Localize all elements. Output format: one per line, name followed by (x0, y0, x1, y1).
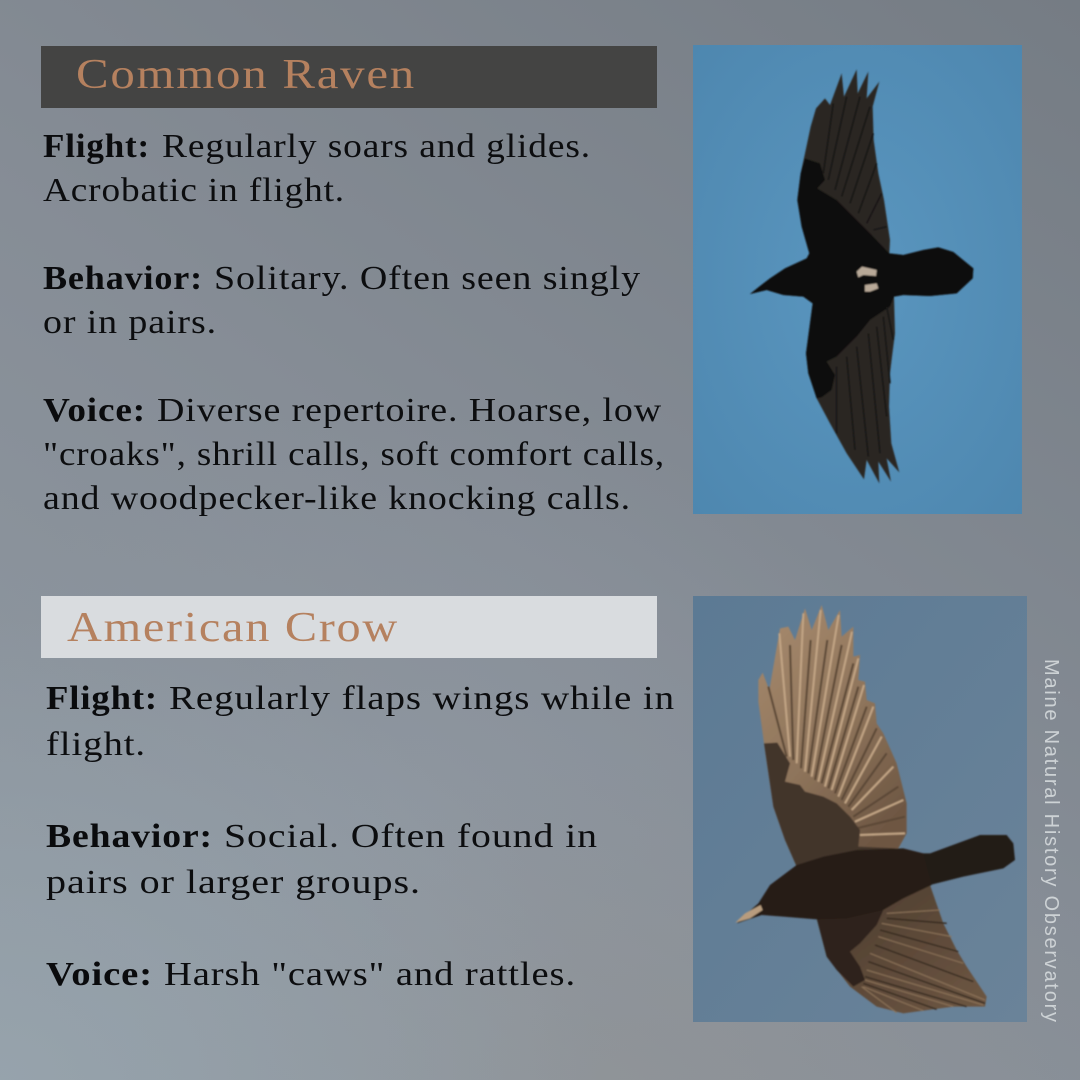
text block: crow flight: Flight: (46, 680, 158, 717)
text block: raven behavior (43, 260, 641, 341)
upper wing (758, 605, 907, 867)
text block: raven flight: Flight: (43, 128, 150, 165)
text block: raven behavior: Behavior: (43, 260, 203, 297)
white wing patches (857, 267, 878, 292)
text block: crow voice: Voice: (46, 956, 153, 993)
text block: raven flight (43, 128, 591, 209)
heading: American Crow (41, 596, 657, 658)
body and head (737, 848, 932, 923)
watermark: Maine Natural History Observatory: Maine Natural History Observatory (1040, 659, 1062, 1022)
text block: crow voice: Harsh "caws" and rattles. (164, 956, 576, 993)
text block: crow behavior: Behavior: (46, 818, 213, 855)
feather lines (823, 97, 893, 457)
text block: raven flight: Regularly soars and glides. (162, 128, 591, 165)
feather lines (779, 610, 905, 835)
text block: crow voice (46, 956, 576, 993)
text block: raven flight: Acrobatic in flight. (43, 172, 345, 209)
text block: crow behavior: pairs or larger groups. (46, 864, 421, 901)
heading: Common Raven (41, 46, 657, 108)
silhouette (750, 69, 973, 483)
text block: raven behavior: or in pairs. (43, 304, 217, 341)
text block: raven voice: Voice: (43, 392, 146, 429)
beak (735, 905, 763, 923)
text block: raven voice: and woodpecker-like knocking calls. (43, 480, 631, 517)
lower wing (817, 885, 987, 1013)
heading: Common Raven: Common Raven (76, 52, 416, 98)
panel: American Crow (41, 596, 1027, 1022)
photo: crow in flight (693, 596, 1027, 1022)
text block: crow flight (46, 680, 675, 763)
text block: raven voice (43, 392, 665, 517)
text block: crow flight: flight. (46, 726, 146, 763)
photo: raven in flight (693, 45, 1022, 514)
text block: crow behavior: Social. Often found in (224, 818, 598, 855)
text block: raven voice: "croaks", shrill calls, soft comfort calls, (43, 436, 665, 473)
tail (903, 835, 1015, 885)
panel: Common Raven (41, 45, 1022, 517)
dark wing coverts (764, 743, 897, 867)
heading: American Crow: American Crow (67, 605, 399, 651)
text block: crow behavior (46, 818, 598, 901)
dark coverts and body (750, 158, 973, 398)
text block: raven behavior: Solitary. Often seen singly (214, 260, 641, 297)
text block: crow flight: Regularly flaps wings while in (169, 680, 675, 717)
text block: raven voice: Diverse repertoire. Hoarse, low (157, 392, 662, 429)
